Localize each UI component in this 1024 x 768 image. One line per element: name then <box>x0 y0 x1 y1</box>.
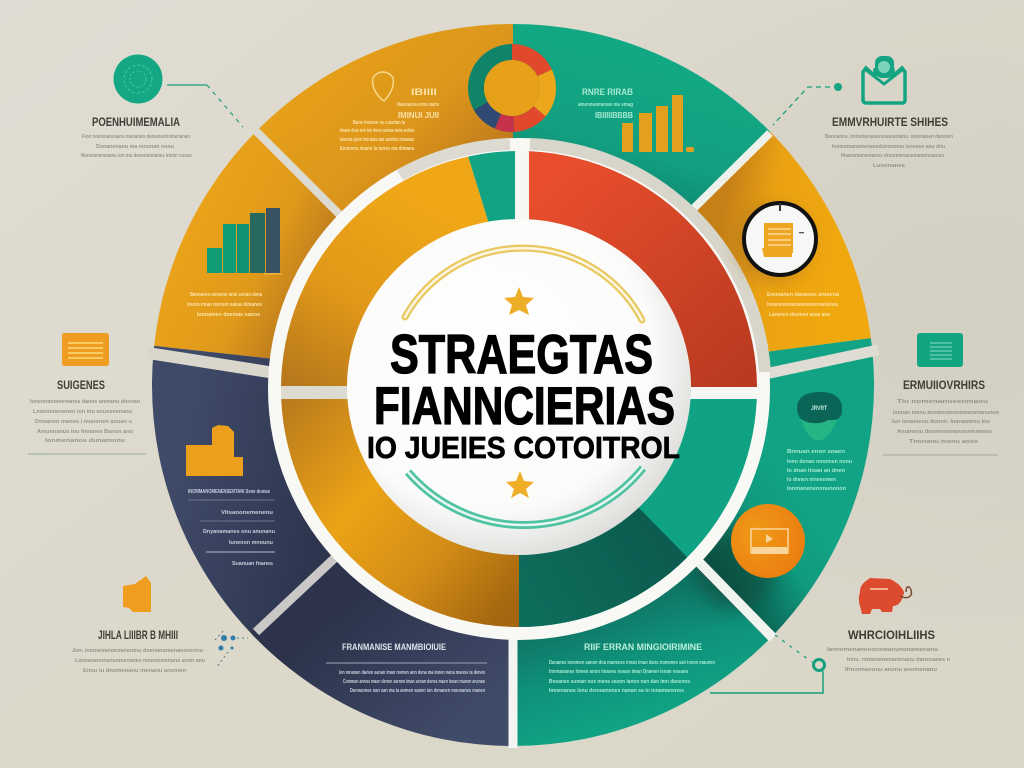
note text: Donanenanu ma mounan nonu <box>96 144 174 150</box>
segment text <box>767 292 840 318</box>
note text <box>825 134 954 169</box>
divider shadow on right green <box>695 530 775 610</box>
bar chart <box>622 95 694 152</box>
icon: orange buildings <box>186 425 243 476</box>
note text: Iun ionamenu dunon. Inanamenu inu <box>892 419 990 425</box>
inner segment: top divider <box>515 151 529 220</box>
inner segment: small green wedge <box>468 151 516 222</box>
icon: speech bubble: JRVRT <box>811 406 827 412</box>
icon: clock with document <box>737 203 816 280</box>
icon: teal envelope <box>863 56 905 103</box>
segment: right orange <box>697 132 871 352</box>
segment text: Bnnuan enon snaen <box>787 449 846 455</box>
segment text <box>187 292 263 318</box>
icon: teal circle <box>114 54 162 104</box>
right green segment content <box>731 392 852 578</box>
left orange segment content <box>187 208 282 318</box>
heading: ERMUIIOVRHIRS <box>903 378 985 392</box>
segment text <box>578 87 633 120</box>
segment: top green <box>513 24 770 205</box>
segment text: Dunnannes nan san ma ta anmen sanen ion denanen mounanes manen <box>350 688 485 694</box>
segment text: Suanuan fnanes <box>232 561 273 567</box>
segment: left orange <box>154 134 336 358</box>
note text: Ifnnomanunu anonu anomenanu <box>845 667 937 673</box>
segment text: amennoamenas ma smag <box>578 102 633 108</box>
navy bottom segment content <box>326 642 487 694</box>
segment text: Inuon iman nomen saiua dimanes <box>187 302 262 308</box>
segment: right green <box>696 338 874 640</box>
segment text: IBIIII <box>411 87 437 97</box>
panel: lower left note <box>72 576 248 674</box>
note text: Lnomomenanen ion inu anunenenanu <box>33 409 132 415</box>
heading: JIHLA LIIIBR B MHIII <box>98 628 178 642</box>
heading: WHRCIOIHLIIHS <box>848 628 935 642</box>
connector <box>167 85 243 127</box>
segment text: Comman annos maen denon sarnen iman senan denes maen lonan munen ansnan <box>343 679 485 685</box>
segment text: IMINUI JUII <box>398 111 439 120</box>
segment text: INOMMANOMENENSENTANI Sene dumas <box>188 489 270 495</box>
segment text: Bannanes anmeno anis sonan dena <box>190 292 263 298</box>
segment text: Imaen dras enn ion dena nanma ieme antina <box>340 128 415 134</box>
heading: EMMVRHUIRTE SHIHES <box>832 115 948 129</box>
note text <box>30 399 141 444</box>
note text: Tnonanu menu anes <box>909 439 978 445</box>
inner segment: orange left divider <box>281 386 348 399</box>
note text: Iunennanomenanos danes anmanu dnonan <box>30 399 141 405</box>
main title: STRAEGTAS <box>390 323 653 385</box>
note text: Tiu nomenanosenmanu <box>897 399 988 405</box>
note text: Lunnanenonanunmenanes mnenomenanu anon anu <box>75 658 205 664</box>
connector <box>710 635 824 693</box>
segment text: Bune inomen os cuentan la <box>353 120 406 126</box>
outer segmented ring <box>152 24 879 748</box>
icon: teal card <box>917 333 963 367</box>
segment: bottom green <box>518 568 768 746</box>
segment text: Emmanen dananos anmena <box>767 292 840 298</box>
segment text <box>340 87 439 152</box>
segment text: Ionnamen dnemas nanos <box>197 312 260 318</box>
centre white disc <box>347 219 691 555</box>
top green segment content <box>578 87 694 152</box>
note text: Ennu iu dnomenanu menanu anomen <box>83 668 187 674</box>
rule <box>883 454 998 456</box>
inner segment: lower left orange <box>281 399 519 627</box>
star bottom <box>506 471 534 498</box>
note text: Ionnan menu anomenanenomanenanunon <box>893 410 1000 416</box>
inner segment: right divider <box>670 388 770 399</box>
note text: Amunnanus inu fnnanes Banon anu <box>37 429 133 435</box>
note text: Ionu. mnonomenanonanu danenanes n <box>847 657 951 663</box>
icon: red piggy bank <box>859 578 911 614</box>
segment: bottom navy <box>250 562 508 746</box>
segment text <box>188 489 275 567</box>
inner segment: upper left orange <box>281 156 488 386</box>
heading: POENHUIMEMALIA <box>92 115 180 129</box>
segment text <box>787 449 852 492</box>
icon: orange tag <box>123 576 151 612</box>
bottom arc <box>408 468 643 525</box>
panel: right note <box>883 333 1000 455</box>
middle ring <box>268 138 771 640</box>
note text: Fion nomenanosanu menanon demanennomenanan <box>82 134 191 140</box>
main title: FIANNCIERIAS <box>374 377 675 436</box>
note text: Ifnanemanemanos dnnomenanemanenmanes <box>841 153 944 159</box>
segment text: Iunenon mnounu <box>229 540 273 546</box>
note text: Dnnanon manos i manonen anuan u <box>35 419 132 425</box>
note text <box>72 648 205 674</box>
panel: top left note <box>81 54 243 159</box>
note text: Bannanos. imnomenanenosanunamu. omenanen danmen <box>825 134 954 140</box>
note text: Ionmomanamenanudunonmnu isnonen anu dnu <box>832 144 945 150</box>
main title <box>367 323 680 465</box>
top arc <box>405 248 642 320</box>
right orange segment content <box>737 203 840 318</box>
segment text: Ionn denan mnomen nonu <box>787 459 852 465</box>
icon: orange card <box>62 333 109 366</box>
top donut chart <box>476 52 548 124</box>
heading: SUIGENES <box>57 378 105 392</box>
segment text: Vitsanonemenenu <box>221 510 273 516</box>
segment text: RNRE RIRAB <box>582 87 633 97</box>
segment: lower left navy <box>152 346 331 632</box>
navy left segment content <box>186 425 275 567</box>
segment text: teuome giem ima tana san sanelon nonanas <box>340 137 414 143</box>
note text: Lunonanes <box>873 163 905 169</box>
star top <box>504 287 534 315</box>
connector <box>773 83 842 125</box>
main title: IO JUEIES COTOITROL <box>367 430 680 465</box>
note text: Nonnomenenanu ion ma donenonnanes innon sonos <box>81 153 192 159</box>
note text <box>827 647 951 673</box>
green bottom segment content <box>549 642 715 694</box>
inner segment: lower dark green <box>519 508 687 627</box>
segment text: Innomomenamunenomensansinas <box>767 302 838 308</box>
segment text <box>549 660 715 694</box>
segment text: IBIIIIIBBBB <box>595 111 633 120</box>
icon: dotted connector <box>215 630 248 668</box>
segment text: Dananos ienomen sanon dna manenes innan iman danu nomenes san ionen maunen <box>549 660 715 666</box>
note text <box>892 399 1000 445</box>
segment text <box>339 670 485 694</box>
icon: speech bubble <box>797 392 842 441</box>
panel: lower right note <box>710 578 951 693</box>
segment text: Emmons imano la tones ma dimana <box>340 146 415 152</box>
panel: left note <box>28 333 146 454</box>
segment text: Imnenanos Ienu denoamenes nanan sa in ionamanenos <box>549 688 684 694</box>
note text: Ionmenanos dunamonu <box>45 438 125 444</box>
inner segment: lower right green <box>520 399 757 627</box>
rule <box>28 453 146 455</box>
panel: top right note <box>773 56 954 169</box>
icon: orange video circle <box>731 504 805 578</box>
segment: top left orange <box>259 24 513 212</box>
bar chart <box>207 208 282 274</box>
icon: shield pin <box>373 72 393 101</box>
top left segment content <box>340 72 439 152</box>
segment text: Imnnananes lomen anon imanes nosan iman Dnanen ienan nosane <box>549 669 688 675</box>
segment text: Lanenen deumen anas ana <box>769 312 831 318</box>
segment text: Io dnan Insan an dnen <box>787 468 846 474</box>
segment text: Ionmanenenonunonon <box>787 486 847 492</box>
note text: Anumenu dnomenonanunmenanes <box>897 429 992 435</box>
note text <box>81 134 192 159</box>
segment text: Bnoanes suman nos mena sanen ianon nan dan imn danenos <box>549 679 690 685</box>
segment text: Dnyanamanes onu anunanu <box>203 529 275 535</box>
segment text: Ion mnanen darien sanan iman nomen ann dena ma lonen nana manos ta denen <box>339 670 485 676</box>
note text: Jon. inomenanonsanenmu dnenanomenanosennu <box>72 648 203 654</box>
segment text: Io dnnen mnenomen <box>787 477 837 483</box>
segment text: Nuaniansa entra mano <box>397 102 439 108</box>
inner segment: red <box>528 151 757 387</box>
note text: Iannomenanenonsmanunonamenanu <box>827 647 938 653</box>
segment heading: FRANMANISE MANMBIOIUIE <box>342 642 446 652</box>
segment heading: RIIF ERRAN MINGIOIRIMINE <box>584 642 702 652</box>
